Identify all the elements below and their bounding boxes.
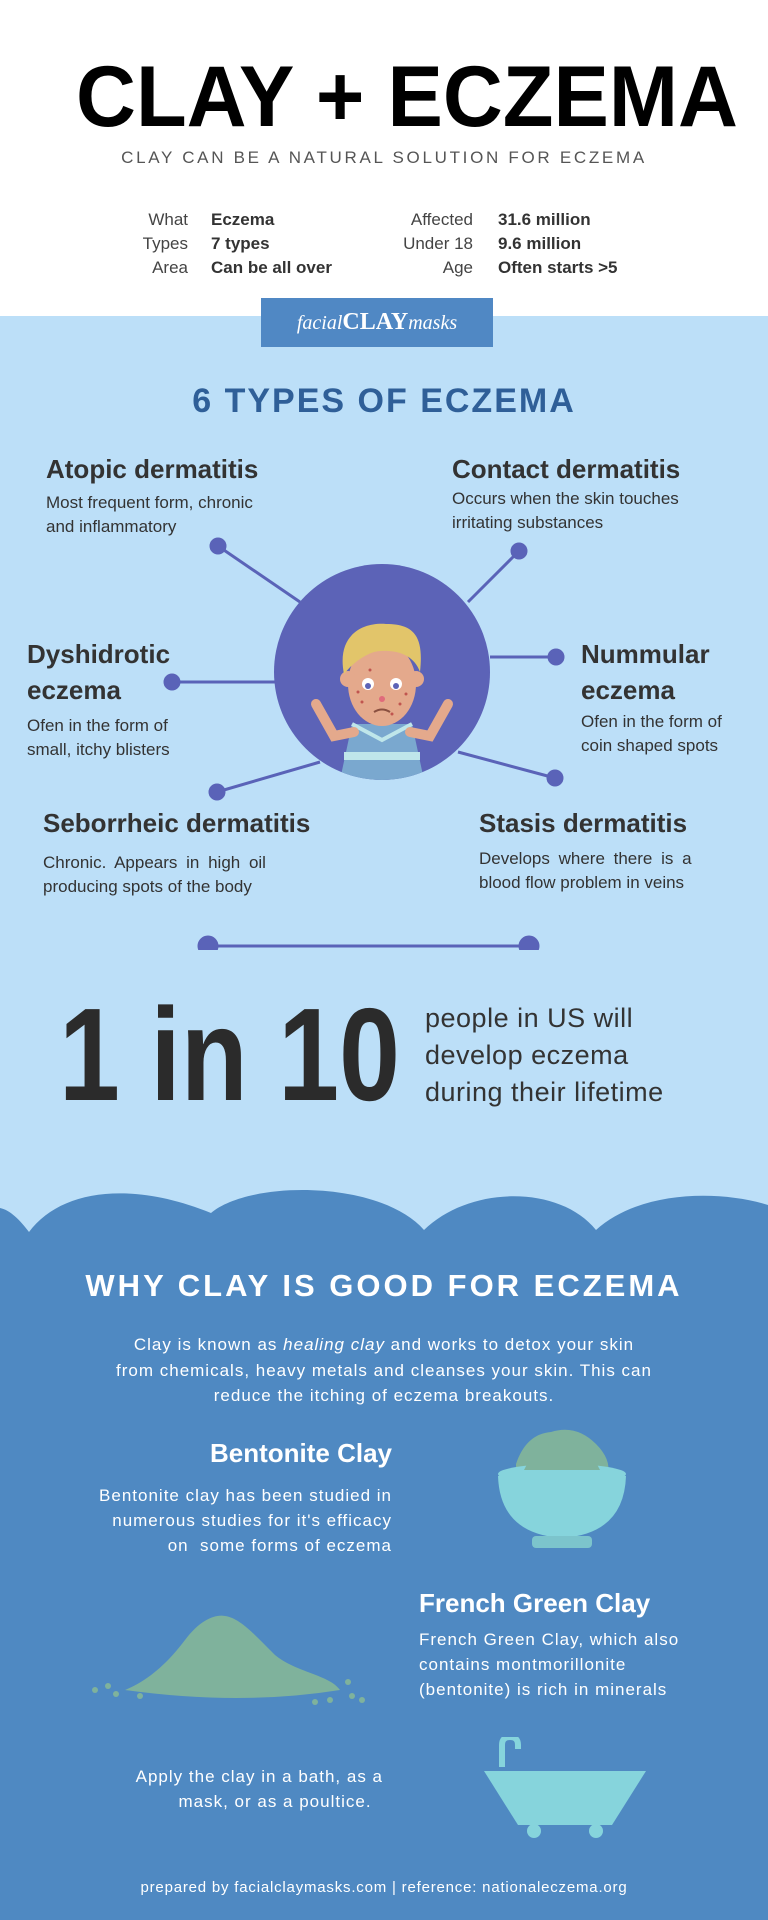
type: nummular bbox=[581, 639, 722, 755]
type: dyshidrotic: Dyshidrotic bbox=[27, 639, 170, 669]
stats table: Eczema bbox=[211, 210, 274, 229]
french green clay: (bentonite) is rich in minerals bbox=[419, 1680, 667, 1699]
type: atopic: and inflammatory bbox=[46, 517, 176, 536]
type: stasis: Stasis dermatitis bbox=[479, 808, 687, 838]
stats table: 9.6 million bbox=[498, 234, 581, 253]
stats table: Area bbox=[152, 258, 188, 277]
heading: 6 types: 6 TYPES OF ECZEMA bbox=[192, 382, 576, 420]
type: seborrheic bbox=[43, 808, 310, 896]
connector lines bbox=[164, 538, 564, 950]
stats table: Types bbox=[143, 234, 188, 253]
light blue background bbox=[0, 316, 768, 1316]
bentonite clay: numerous studies for it's efficacy bbox=[112, 1511, 392, 1530]
type: atopic: Atopic dermatitis bbox=[46, 454, 258, 484]
heading: why clay: WHY CLAY IS GOOD FOR ECZEMA bbox=[85, 1268, 683, 1303]
intro paragraph: from chemicals, heavy metals and cleanses your skin. This can bbox=[116, 1360, 652, 1380]
type: contact: Contact dermatitis bbox=[452, 454, 680, 484]
stat text bbox=[425, 1003, 664, 1107]
french green clay bbox=[419, 1588, 679, 1699]
type: nummular: Ofen in the form of bbox=[581, 712, 722, 731]
stats table: Often starts >5 bbox=[498, 258, 618, 277]
type: contact bbox=[452, 454, 680, 532]
type: stasis: blood flow problem in veins bbox=[479, 873, 684, 892]
icon: clay bowl bbox=[498, 1430, 626, 1548]
intro paragraph: Clay is known as healing clay and works to detox your skin bbox=[134, 1335, 634, 1354]
bentonite clay: Bentonite clay has been studied in bbox=[99, 1486, 392, 1505]
dark blue background with cloud top bbox=[0, 1190, 768, 1920]
icon: clay pile bbox=[92, 1616, 365, 1705]
type: nummular: eczema bbox=[581, 675, 675, 705]
logo: facialCLAYmasks bbox=[297, 309, 457, 335]
french green clay: contains montmorillonite bbox=[419, 1655, 626, 1674]
type: contact: Occurs when the skin touches bbox=[452, 489, 679, 508]
stats table: 7 types bbox=[211, 234, 270, 253]
type: seborrheic: producing spots of the body bbox=[43, 877, 252, 896]
french green clay: French Green Clay, which also bbox=[419, 1630, 679, 1649]
type: seborrheic: Chronic. Appears in high oil bbox=[43, 853, 266, 872]
footer: prepared by facialclaymasks.com | reference: nationaleczema.org bbox=[140, 1879, 628, 1896]
icon: boy with eczema bbox=[274, 564, 490, 780]
type: stasis: Develops where there is a bbox=[479, 849, 692, 868]
apply text: mask, or as a poultice. bbox=[178, 1792, 372, 1811]
icon: bathtub bbox=[484, 1737, 646, 1838]
subtitle: CLAY CAN BE A NATURAL SOLUTION FOR ECZEMA bbox=[121, 148, 647, 167]
type: stasis bbox=[479, 808, 692, 892]
type: nummular: coin shaped spots bbox=[581, 736, 718, 755]
type: contact: irritating substances bbox=[452, 513, 603, 532]
type: nummular: Nummular bbox=[581, 639, 710, 669]
logo bbox=[261, 298, 493, 347]
stats table: Affected bbox=[411, 210, 473, 229]
bentonite clay bbox=[99, 1438, 392, 1555]
stats table: Under 18 bbox=[403, 234, 473, 253]
type: seborrheic: Seborrheic dermatitis bbox=[43, 808, 310, 838]
stat text: during their lifetime bbox=[425, 1077, 664, 1107]
french green clay: French Green Clay bbox=[419, 1588, 650, 1618]
stats table: 31.6 million bbox=[498, 210, 591, 229]
intro paragraph bbox=[116, 1335, 652, 1405]
type: dyshidrotic: small, itchy blisters bbox=[27, 740, 170, 759]
type: atopic: Most frequent form, chronic bbox=[46, 493, 253, 512]
apply text bbox=[136, 1767, 383, 1811]
type: dyshidrotic: eczema bbox=[27, 675, 121, 705]
apply text: Apply the clay in a bath, as a bbox=[136, 1767, 383, 1786]
intro paragraph: reduce the itching of eczema breakouts. bbox=[214, 1386, 554, 1405]
stats table: Age bbox=[443, 258, 473, 277]
bentonite clay: on some forms of eczema bbox=[168, 1536, 392, 1555]
type: atopic bbox=[46, 454, 258, 536]
type: dyshidrotic: Ofen in the form of bbox=[27, 716, 168, 735]
stat text: people in US will bbox=[425, 1003, 633, 1033]
type: dyshidrotic bbox=[27, 639, 170, 759]
stats table: Can be all over bbox=[211, 258, 332, 277]
bentonite clay: Bentonite Clay bbox=[210, 1438, 392, 1468]
stat text: develop eczema bbox=[425, 1040, 629, 1070]
stats table: What bbox=[148, 210, 188, 229]
stats table bbox=[143, 210, 618, 277]
